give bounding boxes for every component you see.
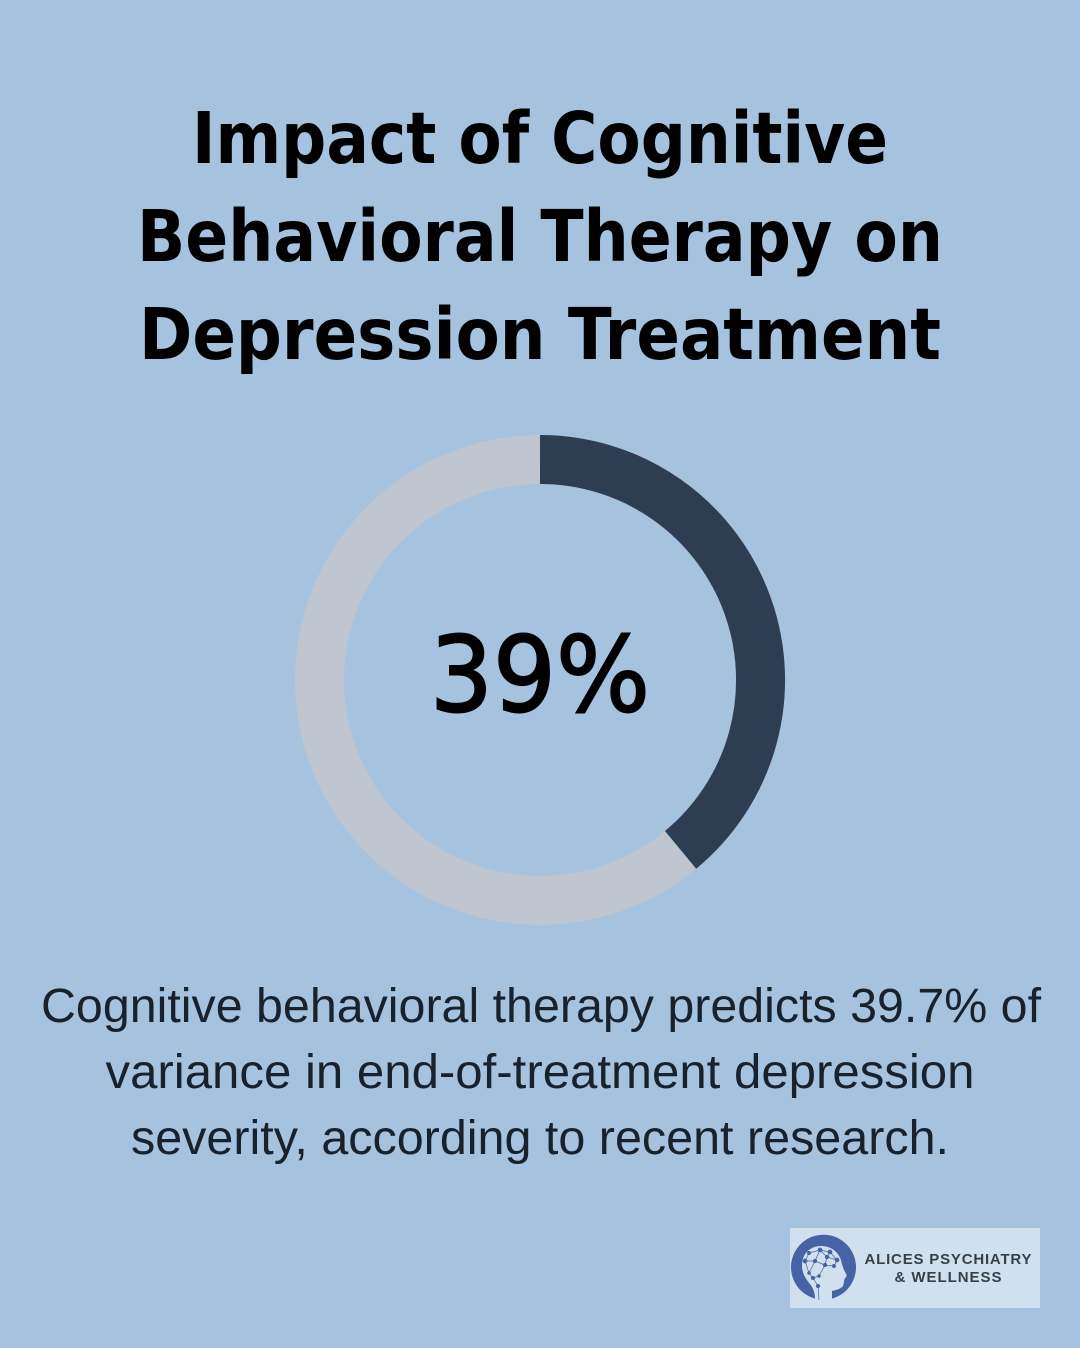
logo text xyxy=(864,1251,1032,1286)
logo text: & WELLNESS xyxy=(894,1269,1002,1286)
title: Impact of Cognitive xyxy=(192,97,888,180)
description text: severity, according to recent research. xyxy=(131,1112,949,1165)
description text: Cognitive behavioral therapy predicts 39.7% of xyxy=(41,980,1042,1033)
description text: variance in end-of-treatment depression xyxy=(106,1046,975,1099)
title: Behavioral Therapy on xyxy=(137,195,943,278)
logo xyxy=(790,1228,1040,1308)
title: Depression Treatment xyxy=(139,293,941,376)
percentage value: 39% xyxy=(430,614,650,736)
logo icon: head with neural network xyxy=(791,1235,856,1300)
description text xyxy=(41,980,1042,1165)
donut chart: 39% xyxy=(320,460,761,900)
logo text: ALICES PSYCHIATRY xyxy=(864,1251,1032,1268)
title xyxy=(137,97,943,376)
